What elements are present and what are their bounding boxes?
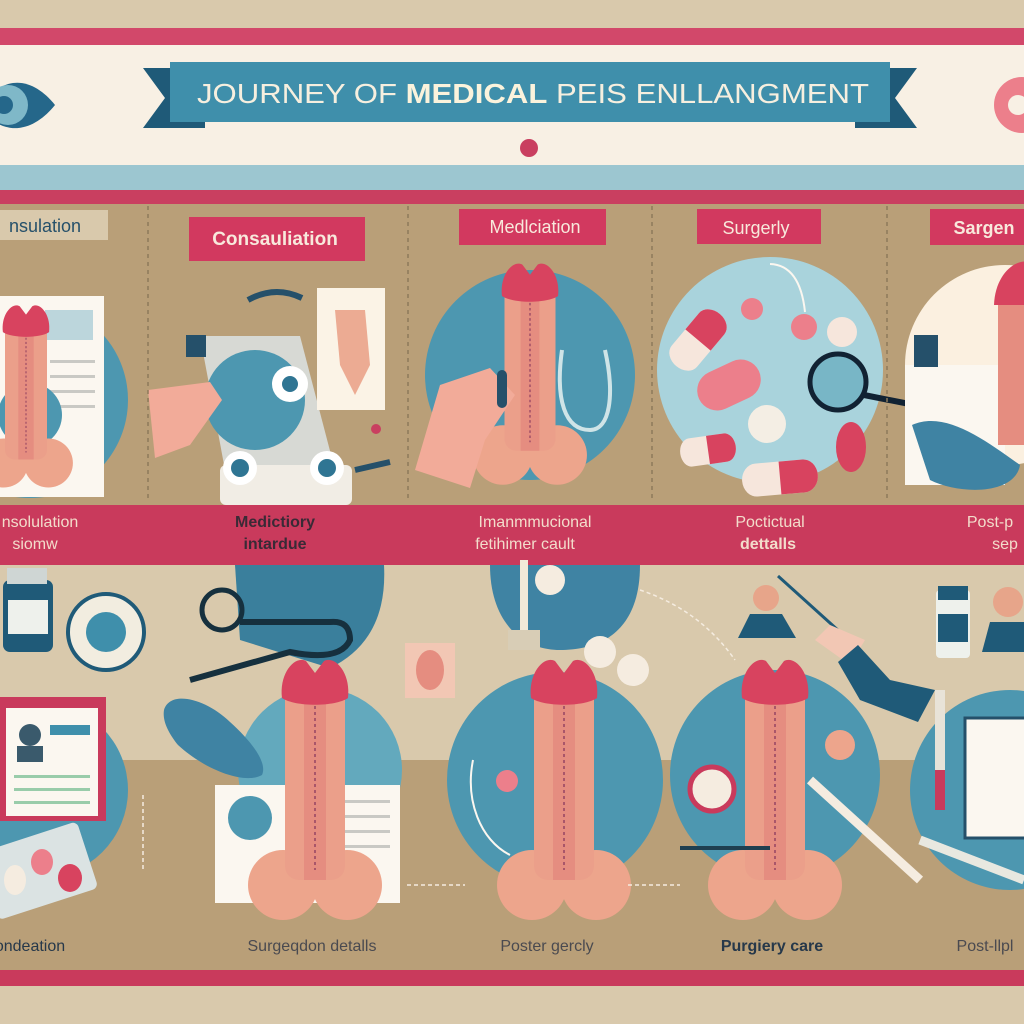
bottom step 1 illustration bbox=[164, 660, 402, 920]
label: consultation bbox=[0, 210, 108, 240]
bottom caption labels: Poster gercly bbox=[500, 938, 594, 955]
bottom caption labels: Post-llpl bbox=[957, 938, 1013, 955]
caption 2 bbox=[235, 514, 315, 553]
bottom caption labels: Surgeqdon detalls bbox=[248, 938, 376, 955]
bottom caption labels bbox=[0, 938, 1013, 955]
bottom red stripe bbox=[0, 970, 1024, 986]
right bottle and person bbox=[936, 586, 1024, 658]
caption 4 bbox=[735, 514, 805, 553]
caption 4: Poctictual bbox=[735, 514, 805, 531]
step 5 illustration bbox=[905, 261, 1024, 490]
caption 4: dettalls bbox=[740, 536, 796, 553]
upper tan panel bbox=[0, 204, 1024, 506]
clipboard with pills bbox=[0, 697, 128, 920]
caption 2: Medictiory bbox=[235, 514, 315, 531]
right lower panel bbox=[910, 690, 1024, 890]
bottom caption labels: Purgiery care bbox=[721, 938, 823, 955]
stethoscope bbox=[190, 590, 350, 680]
title: JOURNEY OF MEDICAL PEIS ENLLANGMENT bbox=[197, 78, 869, 109]
person icon bbox=[738, 585, 796, 638]
large teal circle behind stethoscope bbox=[235, 565, 384, 668]
caption 3 bbox=[475, 514, 591, 553]
icon: heart badge bbox=[994, 77, 1024, 133]
column dividers bbox=[148, 206, 887, 500]
label: consaultation bbox=[189, 217, 365, 261]
step 4 illustration bbox=[657, 257, 945, 498]
caption 3: Imanmmucional bbox=[479, 514, 591, 531]
label: surgery bbox=[697, 209, 821, 244]
banner dot bbox=[520, 139, 538, 157]
header band bbox=[0, 28, 1024, 204]
caption 5 bbox=[967, 514, 1018, 553]
label: surgery right bbox=[930, 209, 1024, 245]
caption 5: Post-p bbox=[967, 514, 1013, 531]
syringe bbox=[778, 576, 935, 722]
lower tan panel bbox=[0, 760, 1024, 970]
bottom step 2 illustration bbox=[405, 560, 663, 920]
label: consultation: nsulation bbox=[9, 216, 81, 236]
title banner bbox=[143, 62, 917, 128]
label: surgery: Surgerly bbox=[722, 218, 790, 238]
caption 1: siomw bbox=[12, 536, 58, 553]
caption 3: fetihimer cault bbox=[475, 536, 575, 553]
red caption band bbox=[0, 505, 1024, 565]
bottom step 3 illustration bbox=[670, 660, 920, 920]
label: medication bbox=[459, 209, 606, 245]
label: consaultation: Consauliation bbox=[212, 229, 338, 250]
caption 1 bbox=[2, 514, 78, 553]
caption 2: intardue bbox=[243, 536, 307, 553]
medicine bottle and dial bbox=[3, 568, 144, 670]
step 3 illustration bbox=[415, 264, 635, 488]
arrows between steps bbox=[143, 590, 735, 885]
caption 5: sep bbox=[992, 536, 1018, 553]
caption 1: nsolulation bbox=[2, 514, 78, 531]
icon: eye bbox=[0, 83, 55, 128]
step 2 illustration bbox=[148, 288, 390, 505]
lower beige panel bbox=[0, 565, 1024, 760]
label: medication: Medlciation bbox=[489, 217, 581, 237]
label: surgery right: Sargen bbox=[953, 218, 1015, 238]
step 1 illustration bbox=[0, 296, 128, 498]
